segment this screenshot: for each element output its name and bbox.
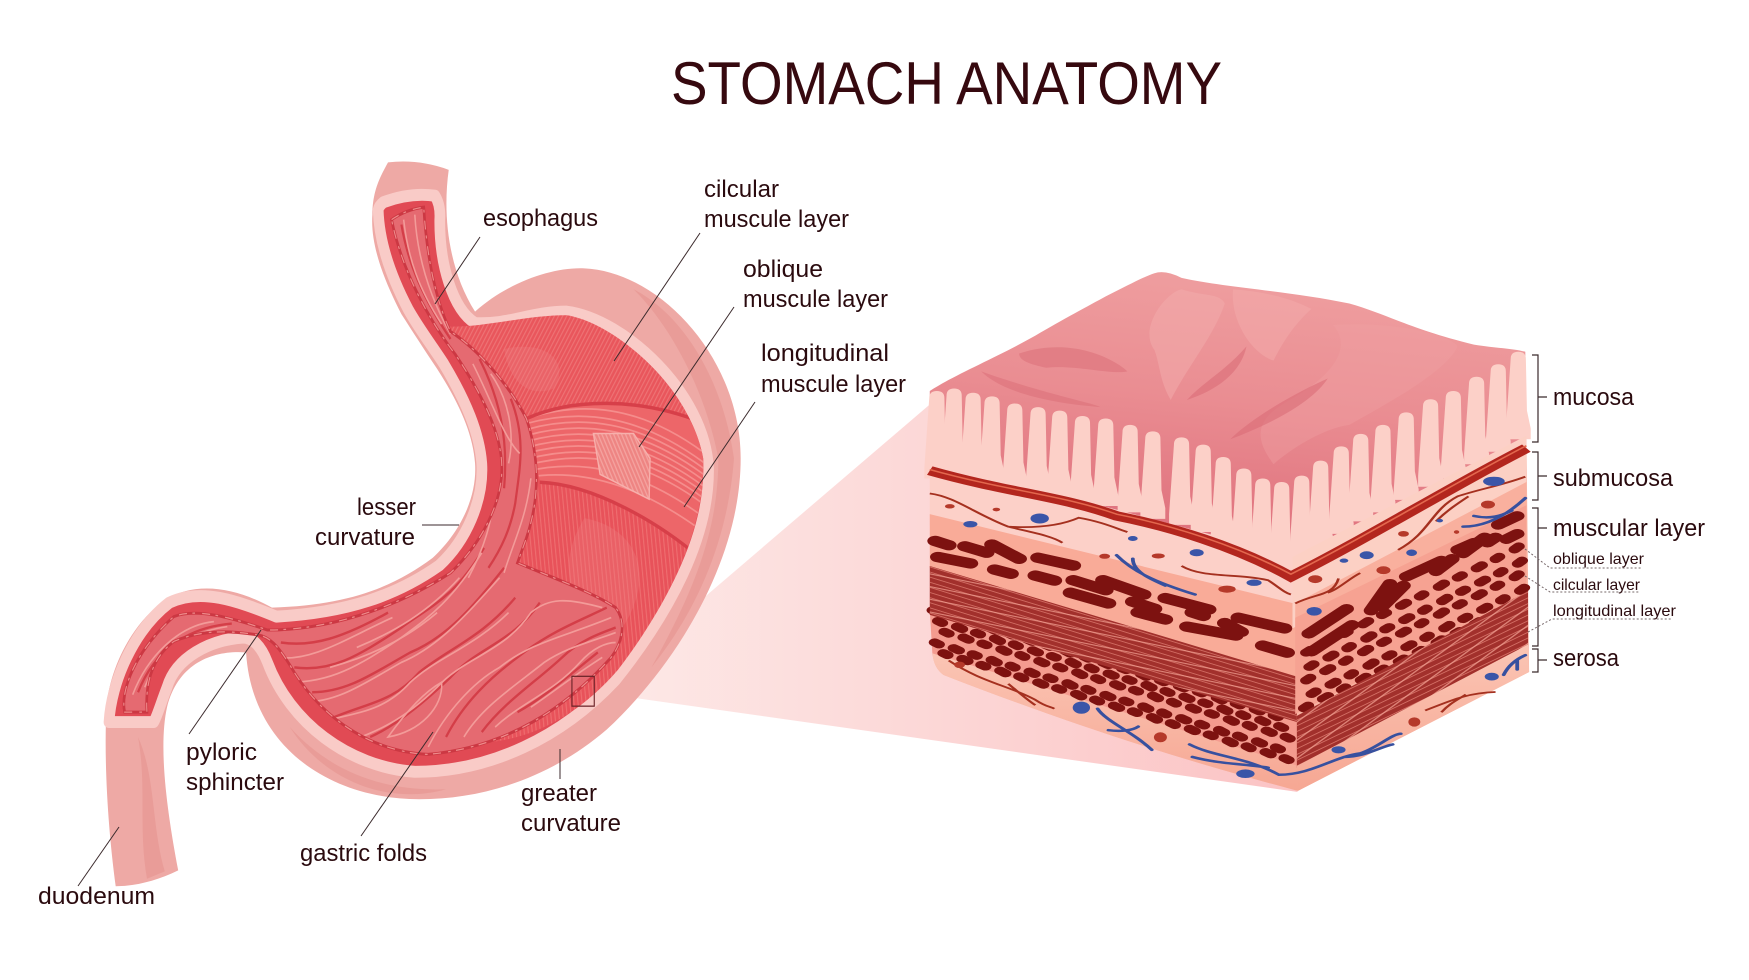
muscle wall red [109, 195, 709, 772]
oblique muscle band [528, 405, 704, 546]
leader line and label: circular muscle layer: muscule layer [704, 206, 849, 233]
muscle background right [1295, 505, 1526, 714]
tissue block cross-section [924, 272, 1531, 791]
mucosa ragged rim [124, 207, 622, 754]
dotted leader and label: longitudinal layer [1528, 603, 1677, 632]
right face layers [1293, 436, 1529, 791]
leader line and label: circular muscle layer [614, 176, 849, 361]
leader line and label: greater curvature: curvature [521, 810, 621, 837]
bracket and label: submucosa [1532, 452, 1674, 500]
long oblique muscle cells left [935, 541, 1287, 653]
dotted leader and label: oblique layer [1525, 549, 1645, 568]
bracket and label: serosa: serosa [1553, 645, 1620, 672]
serosa left [932, 653, 1298, 791]
leader line and label: longitudinal muscle layer [684, 340, 906, 507]
serosa right [1297, 644, 1529, 791]
leader line and label: esophagus: esophagus [483, 205, 598, 232]
magnification wedge [590, 400, 1298, 792]
dotted leader and label: circular layer: cilcular layer [1553, 577, 1641, 594]
blood cells red [945, 501, 1495, 742]
long muscle cells right [1309, 516, 1517, 652]
stomach outer serosa wall [106, 162, 741, 886]
circular layer background left [930, 611, 1297, 771]
mucosa surface top face [930, 272, 1526, 557]
title: STOMACH ANATOMY [671, 50, 1222, 117]
leader line and label: pyloric sphincter [186, 630, 284, 796]
leader line and label: pyloric sphincter: sphincter [186, 769, 284, 796]
bracket and label: mucosa: mucosa [1553, 384, 1635, 411]
leader line and label: greater curvature: greater [521, 780, 597, 807]
surface fold highlights [981, 289, 1458, 464]
leader line and label: greater curvature [521, 749, 621, 837]
oblique layer background left [930, 514, 1297, 678]
magnified sample box [572, 676, 594, 706]
bracket and label: muscular layer: muscular layer [1553, 515, 1705, 542]
leader line and label: duodenum: duodenum [38, 883, 155, 910]
gastric fold lines [133, 215, 616, 747]
gastric mucosa with folds [124, 207, 622, 754]
left villi [924, 389, 1294, 570]
bracket and label: mucosa [1532, 355, 1635, 442]
longitudinal layer left [930, 566, 1297, 722]
block base silhouette [930, 436, 1529, 791]
longitudinal muscle layer [496, 438, 704, 742]
small muscle cells right [1304, 546, 1524, 708]
circular muscle layer [450, 315, 698, 438]
longitudinal layer right [1297, 591, 1528, 768]
dotted leader and label: oblique layer: oblique layer [1553, 551, 1645, 568]
bracket and label: submucosa: submucosa [1553, 465, 1674, 492]
right villi [1289, 352, 1531, 563]
leader line and label: longitudinal muscle layer: longitudinal [761, 340, 889, 367]
leader line and label: lesser curvature [315, 494, 459, 551]
leader line and label: oblique muscle layer: oblique [743, 256, 823, 283]
outer wall shading [138, 289, 734, 879]
red vessels [930, 477, 1525, 712]
leader line and label: lesser curvature: lesser [357, 494, 416, 521]
submucosa pale band left [930, 461, 1297, 618]
leader line and label: esophagus [435, 205, 598, 304]
small circular muscle cells left [932, 610, 1290, 760]
left face layers [930, 461, 1298, 791]
dotted leader and label: longitudinal layer: longitudinal layer [1553, 603, 1677, 620]
band peach right [1295, 482, 1526, 628]
bracket and label: muscular layer [1532, 508, 1705, 646]
submucosa right [1293, 436, 1526, 628]
submucosal artery band [930, 446, 1526, 577]
leader line and label: oblique muscle layer [639, 256, 888, 447]
rear wall muscle layers [450, 315, 704, 742]
leader line and label: oblique muscle layer: muscule layer [743, 286, 888, 313]
leader line and label: duodenum [38, 827, 155, 910]
leader line and label: longitudinal muscle layer: muscule layer [761, 371, 906, 398]
leader line and label: lesser curvature: curvature [315, 524, 415, 551]
blue vessels [1098, 498, 1525, 775]
oblique layer cutout patch [593, 434, 650, 499]
blood cells blue [963, 477, 1505, 778]
leader line and label: gastric folds: gastric folds [300, 840, 427, 867]
leader line and label: pyloric sphincter: pyloric [186, 739, 257, 766]
stomach illustration [106, 162, 741, 886]
muscle tone patches [504, 347, 640, 638]
leader line and label: circular muscle layer: cilcular [704, 176, 779, 203]
leader line and label: gastric folds [300, 732, 433, 867]
